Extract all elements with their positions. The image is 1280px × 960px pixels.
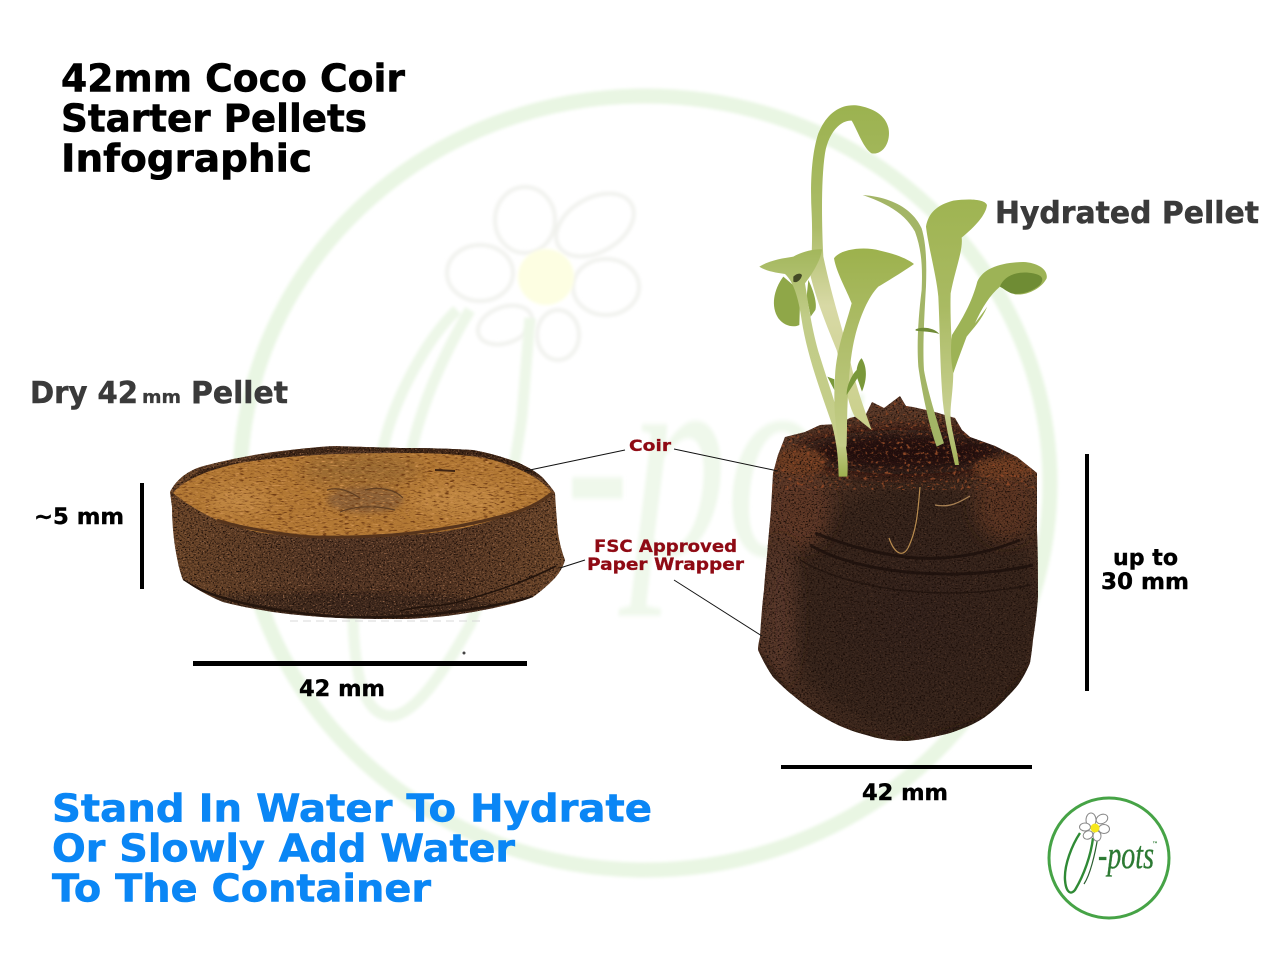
instructions: Stand In Water To Hydrate (52, 786, 652, 830)
seedling: left cupped leaves (759, 249, 848, 477)
title (61, 56, 405, 180)
heading: dry pellet: Dry 42 (30, 376, 138, 411)
logo: U-pots (1049, 798, 1169, 918)
instructions: Or Slowly Add Water (52, 826, 515, 870)
hydrated pellet photo (755, 390, 1045, 745)
dimension: hydrated width (781, 765, 1032, 806)
dimension: dry height (34, 483, 144, 589)
leader lines (525, 449, 778, 636)
dimension: hydrated width: 42 mm (862, 781, 948, 806)
callout: paper wrapper: FSC Approved (594, 537, 737, 557)
seedling: small sprout (827, 358, 866, 395)
icon: logo script loops (1065, 833, 1098, 893)
heading: dry pellet (30, 376, 288, 411)
logo wordmark: -pots (1098, 835, 1154, 877)
title: 42mm Coco Coir (61, 56, 405, 100)
seedling: centre leaf (834, 249, 914, 447)
dimension: dry height: ~5 mm (34, 505, 124, 530)
callout: coir: Coir (629, 436, 671, 455)
callout: paper wrapper (587, 537, 745, 575)
seedling: side shoot (916, 328, 939, 334)
dimension: dry width (193, 661, 527, 702)
seedling: tall hooked (811, 105, 889, 430)
callout: paper wrapper: Paper Wrapper (587, 555, 745, 575)
dimension: hydrated height: up to (1113, 546, 1178, 571)
icon: logo flower (1080, 812, 1110, 841)
dimension: dry width: 42 mm (299, 677, 385, 702)
dimension: hydrated height (1085, 454, 1189, 691)
watermark logo (240, 96, 1050, 870)
title: Starter Pellets (61, 96, 367, 140)
heading: dry pellet: Pellet (191, 376, 288, 411)
title: Infographic (61, 136, 312, 180)
watermark logo: -pots (565, 302, 953, 617)
seedling: far right leaf (951, 262, 1047, 373)
logo trademark: ™ (1152, 841, 1158, 848)
plant seedlings (759, 105, 1047, 477)
heading: dry pellet: mm (142, 387, 181, 408)
seedling: right tall leaf (926, 199, 987, 465)
heading: hydrated pellet: Hydrated Pellet (995, 196, 1259, 231)
dimension: hydrated height: 30 mm (1101, 570, 1189, 595)
dry pellet photo (160, 440, 570, 654)
instructions (52, 786, 652, 910)
instructions: To The Container (52, 866, 431, 910)
seedling: thin leaf stem (863, 195, 944, 447)
